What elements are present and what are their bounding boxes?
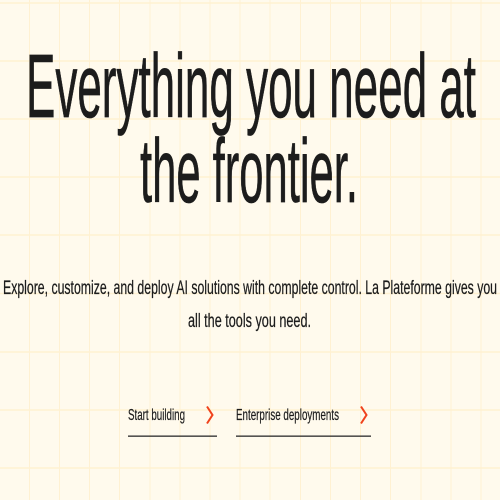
icon: chevron xyxy=(207,406,212,424)
description text xyxy=(3,278,497,332)
title xyxy=(26,37,476,222)
link: enterprise deployments xyxy=(236,406,371,437)
icon: chevron xyxy=(361,406,366,424)
description text: all the tools you need. xyxy=(188,311,311,332)
link: enterprise deployments: Enterprise deployments xyxy=(236,407,339,424)
link: start building: Start building xyxy=(128,407,185,424)
link: start building xyxy=(128,406,217,437)
